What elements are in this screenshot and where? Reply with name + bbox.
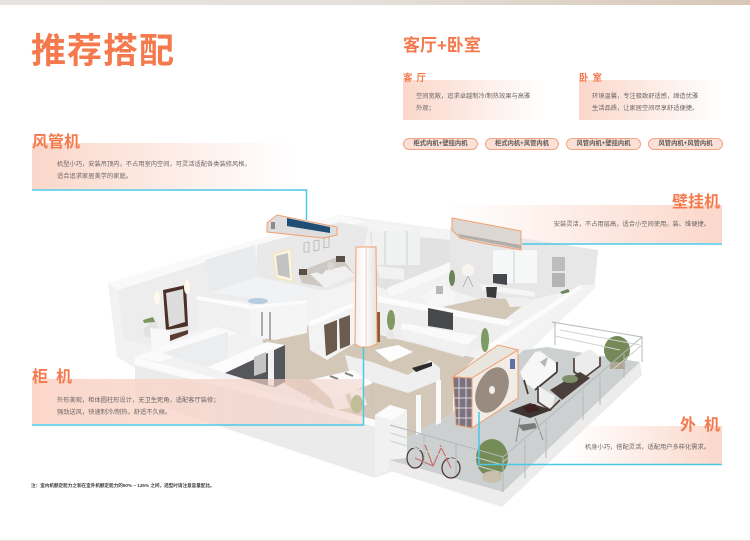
pill: combo 1: [403, 138, 478, 150]
panel background: [32, 143, 294, 189]
kitchen: [135, 327, 285, 387]
description: [57, 396, 220, 416]
terrace railings: [390, 322, 642, 492]
pill: combo 4: [648, 138, 723, 150]
building shell: [108, 215, 598, 507]
panel: duct unit: [32, 133, 254, 189]
panel: wall unit: [491, 193, 722, 243]
heading: 壁挂机: [672, 194, 720, 211]
connector: outdoor unit: [479, 412, 722, 464]
connector: cabinet unit: [32, 347, 364, 425]
description: 外形美观，柜体圆柱形设计，无卫生死角，适配客厅装修；: [57, 397, 220, 404]
upper middle room: [370, 231, 450, 297]
title: 推荐搭配: [31, 32, 175, 71]
terrace floor and slab: [388, 285, 642, 507]
bottom band: [0, 540, 750, 541]
left bath with mirror: [143, 280, 190, 343]
description: 安装灵活，不占用层高，适合小空间使用。装、维便捷。: [554, 221, 710, 228]
living room wall and tv: [378, 296, 513, 357]
bedroom: [257, 222, 368, 314]
panel background: [32, 379, 363, 424]
heading: 卧室: [579, 73, 606, 84]
description: 机型小巧，安装吊顶内，不占用室内空间，可灵活适配各类装修风格，: [57, 161, 251, 168]
connector: duct: [32, 190, 306, 220]
bookcase and divider: [308, 303, 380, 360]
pill: combo 1: 柜式内机+壁挂内机: [413, 140, 468, 147]
panel: cabinet unit: [32, 368, 363, 424]
description: [592, 92, 698, 112]
duct unit: [267, 215, 337, 238]
heading: 外机: [680, 417, 728, 434]
description: 机身小巧，搭配灵活，适配用户多样化需求。: [585, 444, 710, 451]
bicycle: [407, 445, 460, 478]
cabinet unit: [355, 247, 377, 347]
description: [57, 160, 251, 180]
description: 生活品质，让家居空间尽享舒适便捷。: [592, 104, 698, 112]
front wall and terrace stub: [135, 357, 407, 478]
top band: [0, 0, 750, 5]
pill: combo 2: 柜式内机+风管内机: [495, 140, 549, 147]
footnote: 注：室内机额定能力之和在室外机额定能力的50% ~ 135% 之间，选型时请注意容量配比。: [31, 483, 215, 488]
connector: wall unit: [522, 243, 722, 245]
panel: living room: [403, 80, 545, 120]
pill: combo 3: [566, 138, 641, 150]
panel background: [570, 426, 722, 464]
heading: 客厅: [403, 73, 430, 84]
description: 强劲送风，快速制冷/制热，舒适不久候。: [57, 408, 171, 416]
description: [416, 92, 530, 112]
heading: living and bedroom: 客厅+卧室: [403, 36, 481, 55]
living sofa and dining table: [310, 345, 440, 418]
marble bath room: [197, 245, 320, 340]
panel: bedroom: [579, 80, 722, 120]
terrace plants: [476, 336, 630, 483]
panel background: [450, 205, 722, 243]
wall unit: [452, 218, 521, 250]
description: 空间宽敞，追求卓越制冷/制热效果与高雅: [416, 93, 530, 100]
panel: outdoor unit: [585, 416, 728, 464]
description: 外观；: [416, 104, 435, 112]
pill: combo 2: [485, 138, 559, 150]
pill: combo 3: 风管内机+壁挂内机: [576, 140, 631, 147]
study room: [390, 227, 598, 321]
pill: combo 4: 风管内机+风管内机: [658, 140, 713, 147]
description: 环境温馨，专注极致舒适感，缔造优雅: [592, 93, 698, 100]
heading: 风管机: [32, 134, 80, 151]
outdoor unit: [453, 345, 518, 428]
terrace furniture: [509, 349, 600, 442]
description: 适合追求家居美学的家庭。: [57, 172, 132, 180]
heading: 柜机: [32, 369, 80, 386]
